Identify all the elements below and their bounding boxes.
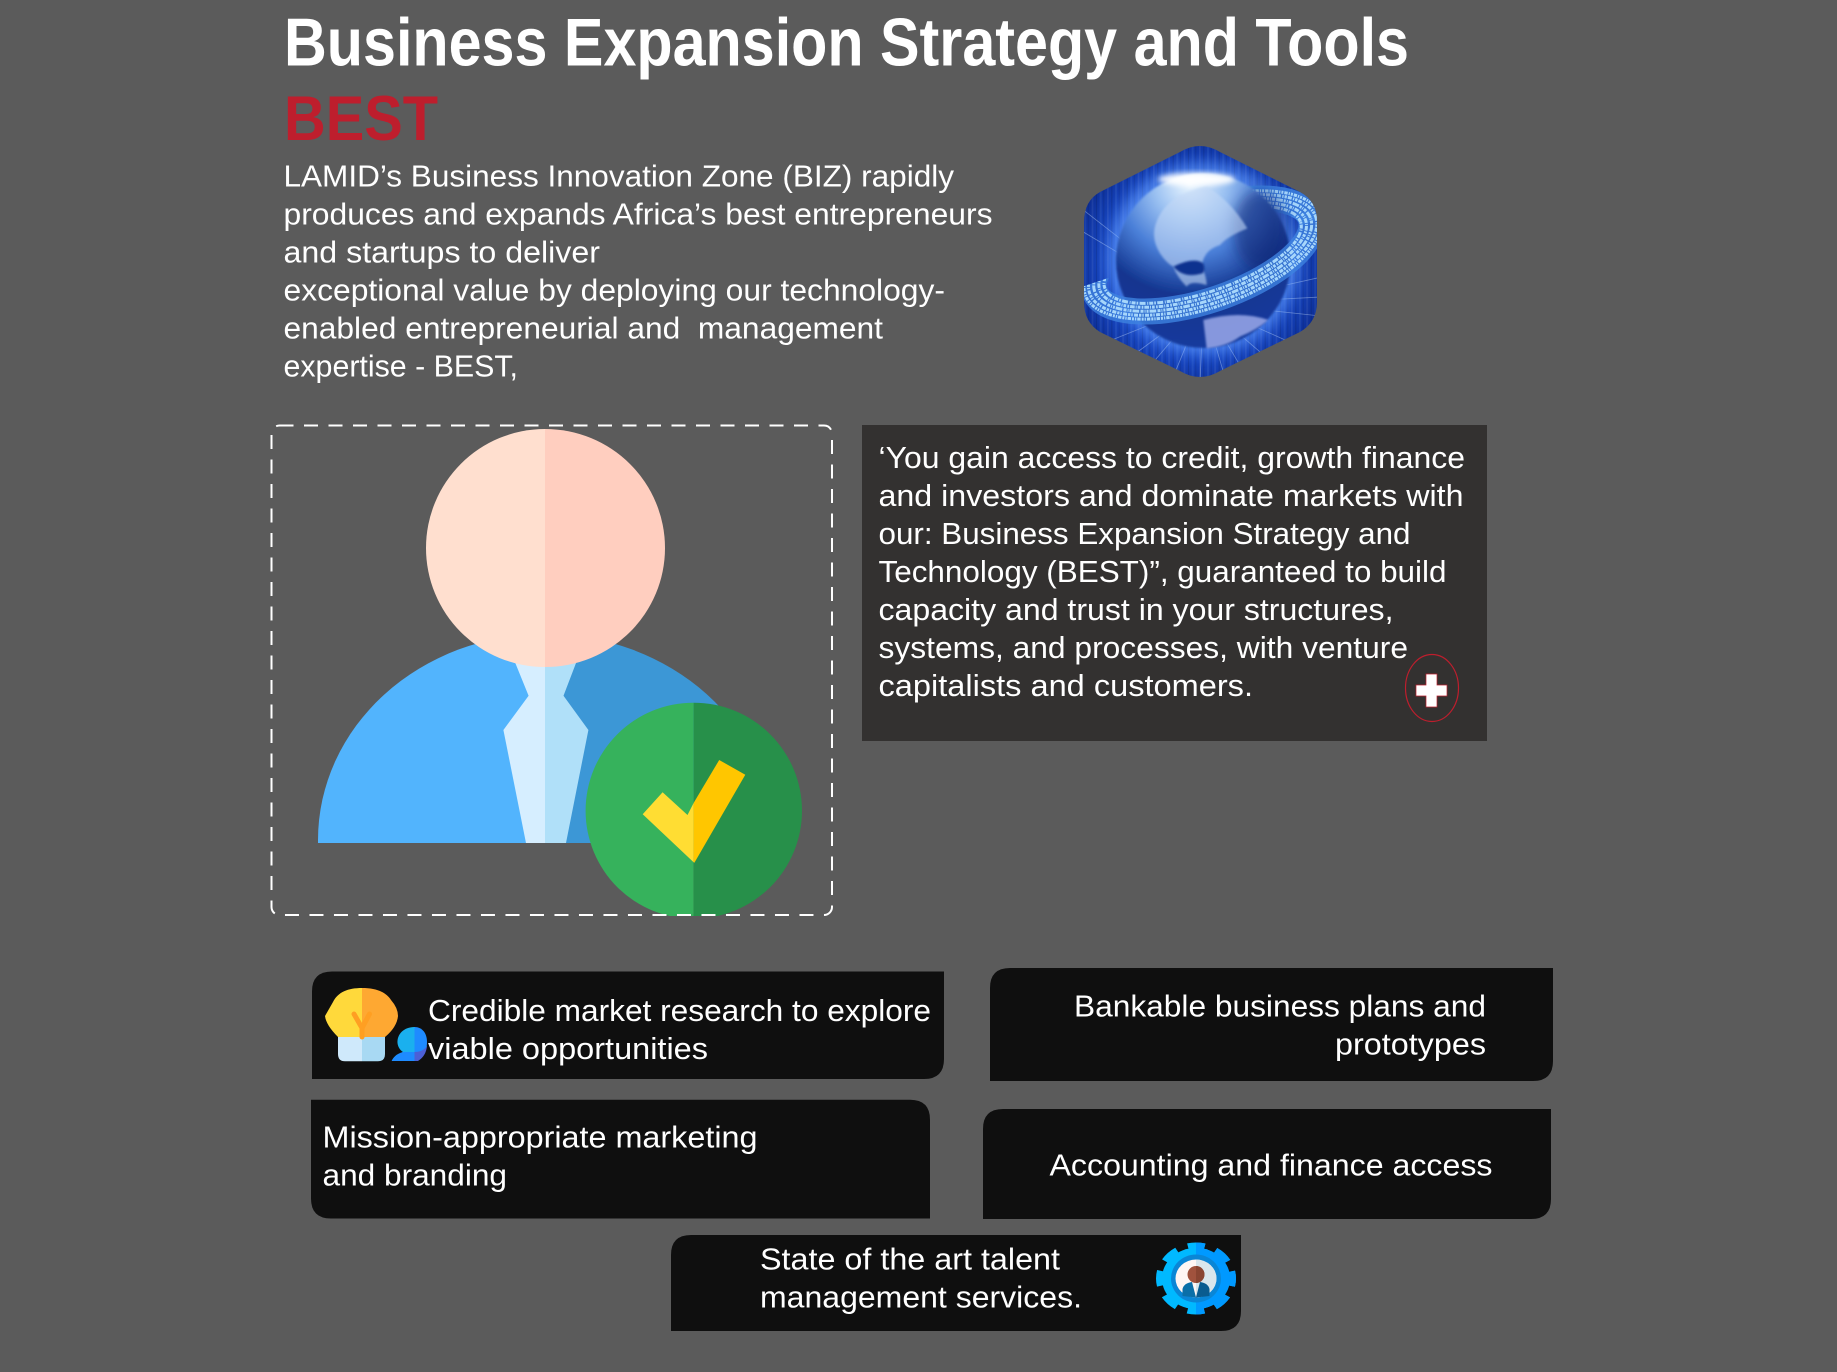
quote text: ‘You gain access to credit, growth finance xyxy=(878,440,1465,475)
card text xyxy=(1074,988,1486,1062)
card text xyxy=(428,993,931,1066)
head xyxy=(426,429,665,667)
icon: gear with person xyxy=(1160,1246,1232,1311)
card text: Mission-appropriate marketing xyxy=(322,1120,758,1154)
card text: viable opportunities xyxy=(428,1031,708,1066)
card: accounting and finance xyxy=(983,1109,1551,1219)
card: marketing and branding xyxy=(311,1100,930,1218)
heading: BEST: BEST xyxy=(284,84,438,154)
quote text: capacity and trust in your structures, xyxy=(878,592,1394,627)
quote text: our: Business Expansion Strategy and xyxy=(878,516,1410,551)
quote text: systems, and processes, with venture xyxy=(878,630,1408,665)
card text: Credible market research to explore xyxy=(428,993,931,1028)
intro text block: LAMID’s Business Innovation Zone (BIZ) rapidly xyxy=(284,158,955,194)
necktie xyxy=(503,650,588,843)
card text: and branding xyxy=(322,1158,507,1192)
quote text: Technology (BEST)”, guaranteed to build xyxy=(878,554,1446,589)
panel: quote xyxy=(862,425,1487,741)
card: market research xyxy=(312,972,944,1079)
card text: State of the art talent xyxy=(760,1242,1060,1276)
card text: Accounting and finance access xyxy=(1050,1148,1492,1182)
intro text block: and startups to deliver xyxy=(284,234,600,270)
card text xyxy=(760,1242,1082,1314)
intro text block: exceptional value by deploying our technology- xyxy=(284,272,945,308)
person body xyxy=(318,634,774,843)
intro text block: expertise - BEST, xyxy=(284,348,518,384)
title: Business Expansion Strategy and Tools xyxy=(284,4,1409,80)
card text: Bankable business plans and xyxy=(1074,988,1486,1024)
card text: prototypes xyxy=(1335,1026,1486,1062)
card text xyxy=(322,1120,758,1192)
dashed frame xyxy=(272,426,832,915)
icon: blue profile head xyxy=(392,1027,427,1061)
icon: plus button xyxy=(1406,654,1458,722)
quote text: and investors and dominate markets with xyxy=(878,478,1464,513)
intro text block: produces and expands Africa’s best entrepreneurs xyxy=(284,196,992,232)
quote text: capitalists and customers. xyxy=(878,668,1253,703)
icon: light bulb xyxy=(325,988,398,1061)
intro text block: enabled entrepreneurial and management xyxy=(284,310,883,346)
card: bankable plans xyxy=(990,968,1553,1081)
card: talent management xyxy=(671,1235,1241,1331)
icon: hexagon globe xyxy=(1084,146,1317,377)
illustration: businessperson with check badge xyxy=(318,429,802,919)
quote text xyxy=(878,440,1465,703)
icon: green check badge xyxy=(586,703,802,919)
card text: management services. xyxy=(760,1280,1082,1314)
intro text block xyxy=(284,158,992,384)
